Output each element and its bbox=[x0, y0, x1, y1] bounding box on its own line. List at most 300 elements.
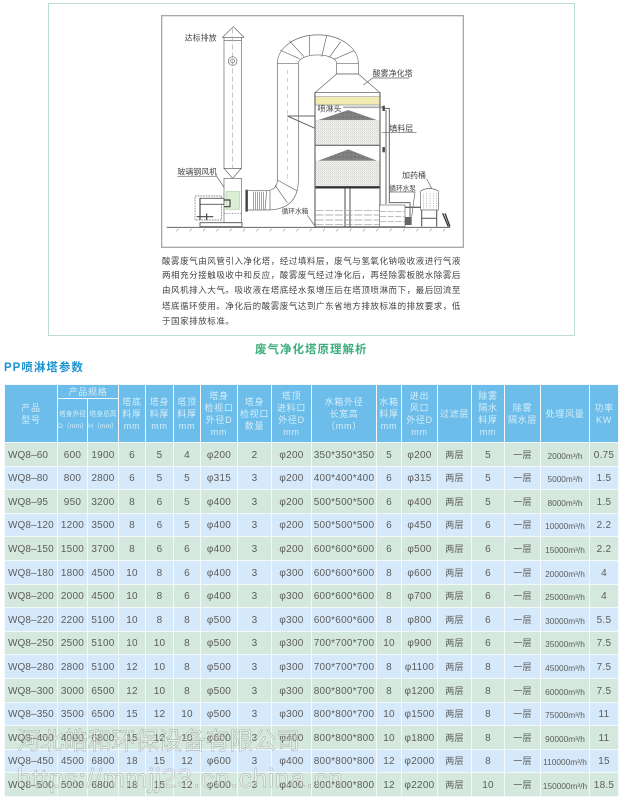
table header: 处理风量 bbox=[546, 408, 584, 418]
row WQ8-150: φ500 bbox=[407, 544, 432, 554]
diagram: acid mist purification tower bbox=[161, 15, 464, 248]
row WQ8-280: φ300 bbox=[279, 662, 304, 672]
row WQ8-280: 10 bbox=[154, 662, 165, 672]
parameter table bbox=[4, 384, 619, 797]
table header: 检视口 bbox=[204, 402, 234, 412]
row WQ8-400 bbox=[5, 726, 618, 749]
row WQ8-500: 两层 bbox=[445, 780, 464, 790]
table header: mm bbox=[124, 420, 140, 430]
row WQ8-220: 8 bbox=[184, 614, 190, 626]
tower bbox=[315, 74, 383, 227]
row WQ8-500: 12 bbox=[383, 780, 395, 790]
table header: D（mm） bbox=[58, 422, 88, 430]
table header: H（mm） bbox=[88, 422, 118, 430]
row WQ8-280: 两层 bbox=[445, 662, 464, 672]
row WQ8-400: φ400 bbox=[279, 732, 304, 744]
table header: 塔身 bbox=[245, 396, 264, 406]
row WQ8-280: 2800 bbox=[61, 662, 84, 672]
watermark: url: https://mmjj23.cn.china.cn bbox=[17, 763, 344, 793]
row WQ8-60: 5 bbox=[485, 450, 491, 460]
row WQ8-95 bbox=[5, 490, 618, 513]
row WQ8-350: 两层 bbox=[445, 709, 464, 719]
row WQ8-60 bbox=[5, 443, 618, 466]
diagram labels: 加药桶 bbox=[402, 170, 426, 180]
row WQ8-400: 4000 bbox=[61, 732, 84, 744]
row WQ8-95: 3200 bbox=[91, 496, 115, 508]
row WQ8-450: φ400 bbox=[279, 756, 304, 767]
heading: parameters: PP喷淋塔参数 bbox=[4, 362, 84, 374]
row WQ8-60: 5 bbox=[157, 450, 162, 460]
row WQ8-80: 5 bbox=[157, 473, 162, 484]
row WQ8-180: 6 bbox=[485, 568, 491, 578]
row WQ8-220: 5.5 bbox=[597, 614, 611, 626]
row WQ8-95: 5 bbox=[485, 496, 491, 508]
row WQ8-60: 2000m³/h bbox=[547, 450, 583, 460]
row WQ8-120: 6 bbox=[157, 520, 162, 531]
row WQ8-180: 1800 bbox=[61, 568, 84, 578]
row WQ8-400: WQ8–400 bbox=[8, 732, 54, 744]
row WQ8-300: 8 bbox=[184, 686, 190, 696]
row WQ8-450 bbox=[5, 750, 618, 772]
row WQ8-450: 110000m³/h bbox=[543, 757, 587, 767]
row WQ8-500: 6800 bbox=[91, 780, 115, 790]
row WQ8-180: 两层 bbox=[445, 568, 464, 578]
row WQ8-300 bbox=[5, 679, 618, 702]
row WQ8-200: 4500 bbox=[91, 591, 115, 602]
row WQ8-250: 8 bbox=[184, 638, 190, 649]
row WQ8-400: 10 bbox=[383, 732, 395, 744]
row WQ8-120: 500*500*500 bbox=[314, 520, 374, 531]
row WQ8-350: φ1500 bbox=[404, 709, 434, 720]
row WQ8-280: 3 bbox=[252, 662, 257, 672]
row WQ8-200: 25000m³/h bbox=[545, 592, 585, 602]
row WQ8-400: 90000m³/h bbox=[545, 734, 585, 744]
row WQ8-250 bbox=[5, 632, 618, 654]
row WQ8-95: 1.5 bbox=[597, 496, 611, 508]
row WQ8-280: 8 bbox=[386, 662, 392, 672]
table header: 外径D bbox=[406, 414, 433, 424]
table header: 进料口 bbox=[277, 402, 306, 412]
row WQ8-60: φ200 bbox=[279, 450, 304, 460]
row WQ8-280: 8 bbox=[485, 662, 491, 672]
row WQ8-120: 3500 bbox=[91, 520, 115, 531]
row WQ8-180: 6 bbox=[184, 568, 190, 578]
row WQ8-500: 150000m³/h bbox=[543, 780, 587, 790]
row WQ8-250: 两层 bbox=[445, 638, 464, 648]
row WQ8-250: 5100 bbox=[91, 638, 115, 649]
row WQ8-60: 0.75 bbox=[594, 450, 614, 460]
row WQ8-200: 4 bbox=[601, 591, 607, 602]
row WQ8-60: 5 bbox=[386, 450, 392, 460]
row WQ8-200: φ400 bbox=[207, 591, 231, 602]
text block: process description bbox=[162, 256, 461, 326]
fan bbox=[195, 192, 239, 220]
table header: 料厚 bbox=[478, 414, 498, 424]
diagram box bbox=[162, 16, 463, 247]
row WQ8-200: φ700 bbox=[407, 591, 432, 602]
row WQ8-450: φ2000 bbox=[404, 756, 434, 767]
row WQ8-500: 800*800*800 bbox=[314, 780, 374, 790]
row WQ8-200: 8 bbox=[157, 591, 162, 602]
row WQ8-280: 一层 bbox=[513, 662, 532, 672]
row WQ8-400: φ600 bbox=[207, 732, 231, 744]
row WQ8-250: 10 bbox=[126, 638, 138, 649]
diagram labels: 喷淋头 bbox=[318, 103, 342, 113]
row WQ8-80: 3 bbox=[252, 473, 257, 484]
row WQ8-150: φ200 bbox=[279, 544, 304, 554]
row WQ8-300: WQ8–300 bbox=[8, 686, 54, 696]
row WQ8-150: 一层 bbox=[513, 544, 532, 554]
row WQ8-200: 8 bbox=[386, 591, 392, 602]
row WQ8-450: WQ8–450 bbox=[8, 756, 54, 767]
row WQ8-220: 一层 bbox=[513, 614, 532, 624]
row WQ8-95: 6 bbox=[386, 496, 392, 508]
row WQ8-220: 600*600*600 bbox=[314, 614, 374, 626]
row WQ8-120: 两层 bbox=[445, 520, 464, 530]
row WQ8-150: 2.2 bbox=[597, 544, 611, 554]
row WQ8-500: 10 bbox=[482, 780, 494, 790]
row WQ8-150: φ400 bbox=[207, 544, 231, 554]
row WQ8-250: 700*700*700 bbox=[314, 638, 374, 649]
row WQ8-300: 两层 bbox=[445, 686, 464, 696]
row WQ8-400: 11 bbox=[599, 732, 609, 744]
row WQ8-280: 7.5 bbox=[597, 662, 611, 672]
row WQ8-60: 600 bbox=[64, 450, 81, 460]
row WQ8-95: 950 bbox=[64, 496, 81, 508]
row WQ8-250: 3 bbox=[252, 638, 257, 649]
row WQ8-80: φ200 bbox=[279, 473, 304, 484]
row WQ8-60: WQ8–60 bbox=[8, 450, 48, 460]
row WQ8-120: 10000m³/h bbox=[545, 521, 585, 531]
row WQ8-450: 6800 bbox=[91, 756, 115, 767]
circulation pipe and water tank bbox=[379, 106, 421, 227]
row WQ8-300: 7.5 bbox=[597, 686, 611, 696]
row WQ8-180: 600*600*600 bbox=[314, 568, 374, 578]
row WQ8-120: 2.2 bbox=[597, 520, 611, 531]
row WQ8-150: WQ8–150 bbox=[8, 544, 54, 554]
text block: process description: 塔底循环使用。净化后的酸雾废气达到广东省地方排放标准的排放要求，低 bbox=[162, 301, 461, 311]
row WQ8-120: 5 bbox=[184, 520, 190, 531]
row WQ8-150 bbox=[5, 537, 618, 560]
table header: mm bbox=[151, 420, 168, 430]
table header: 料厚 bbox=[150, 408, 169, 418]
elbow and vertical duct bbox=[246, 35, 358, 211]
table header bbox=[5, 385, 618, 442]
table header: 型号 bbox=[21, 414, 41, 424]
row WQ8-280: 8 bbox=[184, 662, 190, 672]
row WQ8-60: 1900 bbox=[91, 450, 115, 460]
row WQ8-220: 2200 bbox=[61, 614, 84, 626]
text block: process description: 于国家排放标准。 bbox=[162, 316, 234, 326]
row WQ8-95: 6 bbox=[157, 496, 162, 508]
row WQ8-120 bbox=[5, 514, 618, 536]
row WQ8-350: 11 bbox=[599, 709, 609, 720]
row WQ8-120: φ400 bbox=[207, 520, 231, 531]
table body bbox=[5, 443, 618, 796]
dosing tank bbox=[421, 188, 450, 227]
row WQ8-300: φ500 bbox=[207, 686, 231, 696]
row WQ8-60: φ200 bbox=[407, 450, 432, 460]
row WQ8-450: 3 bbox=[252, 756, 257, 767]
row WQ8-500: 5000 bbox=[61, 780, 84, 790]
row WQ8-80: 5000m³/h bbox=[547, 474, 583, 484]
row WQ8-500: 18 bbox=[126, 780, 138, 790]
row WQ8-95: 5 bbox=[184, 496, 190, 508]
row WQ8-60: 6 bbox=[129, 450, 135, 460]
row WQ8-220: φ500 bbox=[207, 614, 231, 626]
row WQ8-300: φ1200 bbox=[404, 686, 434, 696]
row WQ8-500: φ600 bbox=[207, 780, 231, 790]
table header: mm bbox=[411, 426, 428, 436]
table header: 水箱 bbox=[379, 396, 399, 406]
row WQ8-350: 8 bbox=[485, 709, 491, 720]
row WQ8-220: 8 bbox=[157, 614, 162, 626]
table header: mm bbox=[283, 426, 300, 436]
row WQ8-95: 500*500*500 bbox=[314, 496, 374, 508]
row WQ8-500: φ2200 bbox=[404, 780, 434, 790]
table header: 数量 bbox=[245, 420, 264, 430]
diagram labels: 酸雾净化塔 bbox=[373, 68, 413, 78]
table header: 检视口 bbox=[240, 408, 269, 418]
row WQ8-150: 600*600*600 bbox=[314, 544, 374, 554]
row WQ8-80 bbox=[5, 467, 618, 489]
row WQ8-80: 一层 bbox=[513, 473, 532, 483]
row WQ8-95: 3 bbox=[252, 496, 257, 508]
table header: 隔水层 bbox=[508, 414, 537, 424]
row WQ8-400: 12 bbox=[154, 732, 165, 744]
row WQ8-280: 5100 bbox=[91, 662, 115, 672]
row WQ8-300: 8 bbox=[485, 686, 491, 696]
diagram labels: 达标排放 bbox=[185, 33, 217, 43]
row WQ8-350: 75000m³/h bbox=[545, 710, 585, 720]
row WQ8-60: 4 bbox=[184, 450, 190, 460]
row WQ8-95: φ200 bbox=[279, 496, 304, 508]
panel: principle frame bbox=[48, 3, 575, 336]
row WQ8-150: 6 bbox=[184, 544, 190, 554]
row WQ8-200: φ300 bbox=[279, 591, 304, 602]
row WQ8-200: 一层 bbox=[513, 591, 532, 601]
row WQ8-150: 8 bbox=[129, 544, 135, 554]
row WQ8-400: 3 bbox=[252, 732, 257, 744]
row WQ8-280: 12 bbox=[126, 662, 138, 672]
row WQ8-450: 12 bbox=[383, 756, 395, 767]
row WQ8-450: 两层 bbox=[445, 756, 464, 766]
row WQ8-250: 10 bbox=[383, 638, 395, 649]
row WQ8-95: WQ8–95 bbox=[8, 496, 48, 508]
row WQ8-150: 两层 bbox=[445, 544, 464, 554]
row WQ8-220: φ300 bbox=[279, 614, 304, 626]
row WQ8-200: 600*600*600 bbox=[314, 591, 374, 602]
row WQ8-80: 6 bbox=[386, 473, 392, 484]
table header: 产品 bbox=[21, 402, 41, 412]
table header: 外径D bbox=[278, 414, 305, 424]
table header: mm bbox=[480, 426, 496, 436]
row WQ8-250: 7.5 bbox=[597, 638, 611, 649]
table header: 过滤层 bbox=[440, 408, 469, 418]
table header: 塔身 bbox=[209, 390, 229, 400]
table header: KW bbox=[596, 414, 612, 424]
row WQ8-300: 6500 bbox=[91, 686, 115, 696]
row WQ8-180: 10 bbox=[126, 568, 138, 578]
row WQ8-180: WQ8–180 bbox=[8, 568, 54, 578]
row WQ8-350: 3500 bbox=[61, 709, 84, 720]
diagram labels: 填料层 bbox=[389, 123, 413, 133]
row WQ8-220: WQ8–220 bbox=[8, 614, 54, 626]
row WQ8-200: 3 bbox=[252, 591, 257, 602]
row WQ8-120: φ450 bbox=[407, 520, 432, 531]
row WQ8-350: 10 bbox=[181, 709, 193, 720]
row WQ8-250: 一层 bbox=[513, 638, 532, 648]
row WQ8-400: 6800 bbox=[91, 732, 115, 744]
row WQ8-180: φ300 bbox=[279, 568, 304, 578]
row WQ8-95: 8 bbox=[129, 496, 135, 508]
row WQ8-350: 一层 bbox=[513, 709, 532, 719]
row WQ8-80: 2800 bbox=[91, 473, 115, 484]
row WQ8-300: 800*800*700 bbox=[314, 686, 374, 696]
row WQ8-200: WQ8–200 bbox=[8, 591, 54, 602]
table header: 长宽高 bbox=[329, 408, 359, 418]
row WQ8-250: 2500 bbox=[61, 638, 84, 649]
row WQ8-150: 3700 bbox=[91, 544, 115, 554]
row WQ8-200: 6 bbox=[184, 591, 190, 602]
row WQ8-120: 1200 bbox=[61, 520, 84, 531]
row WQ8-250: 35000m³/h bbox=[545, 639, 585, 649]
row WQ8-280: φ1100 bbox=[405, 662, 434, 672]
diagram labels bbox=[177, 33, 426, 216]
row WQ8-180: 8 bbox=[157, 568, 162, 578]
row WQ8-120: 8 bbox=[129, 520, 135, 531]
row WQ8-60: 2 bbox=[252, 450, 257, 460]
row WQ8-250: 6 bbox=[485, 638, 491, 649]
table header: 功率 bbox=[594, 402, 614, 412]
row WQ8-450: 8 bbox=[485, 756, 491, 767]
row WQ8-60: φ200 bbox=[207, 450, 231, 460]
row WQ8-300: 10 bbox=[154, 686, 165, 696]
text block: process description: 两相充分接触吸收中和反应，酸雾废气经过净化后，再经除雾板脱水除雾后 bbox=[162, 270, 461, 280]
row WQ8-80: 400*400*400 bbox=[314, 473, 374, 484]
table header: 隔水 bbox=[478, 402, 498, 412]
row WQ8-220: 两层 bbox=[445, 614, 464, 624]
row WQ8-350: 12 bbox=[154, 709, 165, 720]
table header: 除雾 bbox=[478, 390, 498, 400]
row WQ8-180: 4500 bbox=[91, 568, 115, 578]
row WQ8-80: 两层 bbox=[445, 473, 464, 483]
row WQ8-220 bbox=[5, 608, 618, 631]
row WQ8-95: 一层 bbox=[513, 496, 532, 506]
row WQ8-250: φ900 bbox=[407, 638, 432, 649]
row WQ8-300: 8 bbox=[386, 686, 392, 696]
row WQ8-80: 6 bbox=[129, 473, 135, 484]
table header: 进出 bbox=[410, 390, 429, 400]
row WQ8-200: 两层 bbox=[445, 591, 464, 601]
row WQ8-450: 800*800*800 bbox=[314, 756, 374, 767]
row WQ8-220: 8 bbox=[386, 614, 392, 626]
row WQ8-60: 两层 bbox=[445, 450, 464, 460]
row WQ8-200: 10 bbox=[126, 591, 138, 602]
row WQ8-150: 1500 bbox=[61, 544, 84, 554]
watermark: company name: 河北皓和环保设备有限公司 bbox=[17, 729, 300, 755]
row WQ8-500 bbox=[5, 773, 618, 796]
row WQ8-60: 350*350*350 bbox=[314, 450, 374, 460]
row WQ8-350: 800*800*700 bbox=[314, 709, 374, 720]
table header: 水箱外径 bbox=[325, 396, 363, 406]
row WQ8-220: 5100 bbox=[91, 614, 115, 626]
label leader lines bbox=[177, 78, 432, 226]
row WQ8-450: 15 bbox=[598, 756, 610, 767]
table header: 除雾 bbox=[513, 402, 532, 412]
row WQ8-220: 30000m³/h bbox=[545, 616, 585, 626]
row WQ8-95: φ400 bbox=[207, 496, 231, 508]
table header: 塔顶 bbox=[177, 396, 197, 406]
row WQ8-80: φ315 bbox=[407, 473, 432, 484]
row WQ8-300: 3 bbox=[252, 686, 257, 696]
row WQ8-400: 10 bbox=[181, 732, 193, 744]
table header: 塔身 bbox=[150, 396, 169, 406]
row WQ8-220: 10 bbox=[126, 614, 138, 626]
row WQ8-500: φ400 bbox=[279, 780, 304, 790]
row WQ8-150: 6 bbox=[157, 544, 162, 554]
row WQ8-120: 6 bbox=[386, 520, 392, 531]
table header: 料厚 bbox=[122, 408, 142, 418]
row WQ8-400: 两层 bbox=[445, 732, 464, 742]
row WQ8-120: 一层 bbox=[513, 520, 532, 530]
diagram labels: 循环水箱 bbox=[282, 207, 309, 216]
table header: 料厚 bbox=[379, 408, 399, 418]
row WQ8-350: φ300 bbox=[279, 709, 304, 720]
row WQ8-350: 15 bbox=[126, 709, 138, 720]
row WQ8-180: 3 bbox=[252, 568, 257, 578]
row WQ8-150: 6 bbox=[386, 544, 392, 554]
row WQ8-60: 一层 bbox=[513, 450, 532, 460]
row WQ8-150: 15000m³/h bbox=[545, 544, 585, 554]
row WQ8-400: 一层 bbox=[513, 732, 532, 742]
table header: mm bbox=[381, 420, 397, 430]
row WQ8-180 bbox=[5, 561, 618, 584]
row WQ8-300: φ300 bbox=[279, 686, 304, 696]
text block: process description: 由风机排入大气。吸收液在塔底经水泵增压后在塔顶喷淋而下，最后回流至 bbox=[162, 285, 461, 295]
row WQ8-500: WQ8–500 bbox=[8, 780, 54, 790]
table header: mm bbox=[211, 426, 227, 436]
row WQ8-220: φ800 bbox=[407, 614, 432, 626]
row WQ8-95: 两层 bbox=[445, 496, 464, 506]
diagram labels: 循环水泵 bbox=[389, 183, 416, 192]
row WQ8-280 bbox=[5, 655, 618, 678]
row WQ8-80: 5 bbox=[485, 473, 491, 484]
row WQ8-220: 6 bbox=[485, 614, 491, 626]
row WQ8-500: 18.5 bbox=[594, 780, 614, 790]
row WQ8-450: φ600 bbox=[207, 756, 231, 767]
row WQ8-450: 18 bbox=[126, 756, 138, 767]
row WQ8-220: 3 bbox=[252, 614, 257, 626]
row WQ8-120: φ200 bbox=[279, 520, 304, 531]
row WQ8-180: 8 bbox=[386, 568, 392, 578]
row WQ8-280: 700*700*700 bbox=[314, 662, 374, 672]
table header: （mm） bbox=[326, 420, 362, 430]
row WQ8-350: 10 bbox=[383, 709, 395, 720]
row WQ8-200: 2000 bbox=[61, 591, 84, 602]
row WQ8-400: 800*800*800 bbox=[314, 732, 374, 744]
row WQ8-400: φ1800 bbox=[404, 732, 434, 744]
row WQ8-350: 6500 bbox=[91, 709, 115, 720]
row WQ8-120: WQ8–120 bbox=[8, 520, 54, 531]
row WQ8-250: φ300 bbox=[279, 638, 304, 649]
row WQ8-200: 6 bbox=[485, 591, 491, 602]
row WQ8-280: 45000m³/h bbox=[545, 662, 585, 672]
row WQ8-500: 12 bbox=[181, 780, 193, 790]
row WQ8-350: WQ8–350 bbox=[8, 709, 54, 720]
table header: 产品规格 bbox=[69, 386, 107, 396]
row WQ8-150: 6 bbox=[485, 544, 491, 554]
